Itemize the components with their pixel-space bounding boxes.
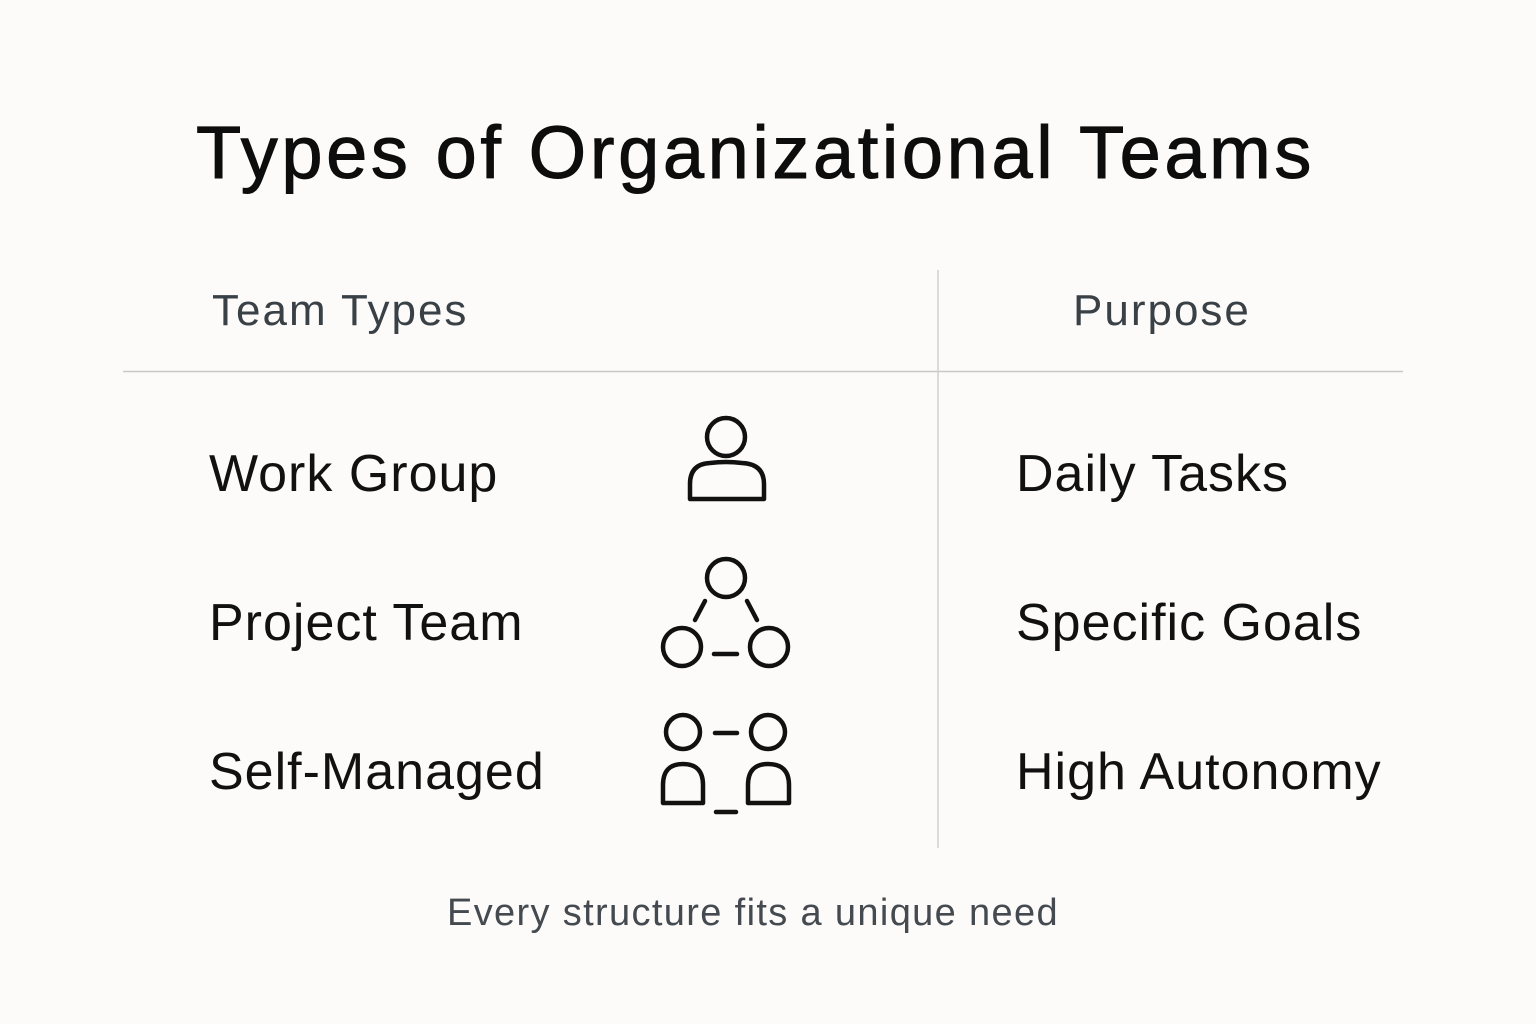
- row: work group: Work Group: [209, 445, 498, 503]
- icon: self-managed pair: [660, 712, 792, 814]
- purpose: specific goals: Specific Goals: [1016, 594, 1362, 652]
- title: Types of Organizational Teams: [196, 111, 1315, 194]
- row: self-managed: Self-Managed: [209, 743, 545, 801]
- icon: single person: [688, 416, 766, 502]
- header: purpose: Purpose: [1073, 286, 1251, 335]
- footer caption: Every structure fits a unique need: [447, 892, 1059, 934]
- icon: triangle network: [660, 556, 790, 668]
- purpose: daily tasks: Daily Tasks: [1016, 445, 1289, 503]
- purpose: high autonomy: High Autonomy: [1016, 743, 1382, 801]
- header: team types: Team Types: [212, 286, 468, 335]
- row: project team: Project Team: [209, 594, 524, 652]
